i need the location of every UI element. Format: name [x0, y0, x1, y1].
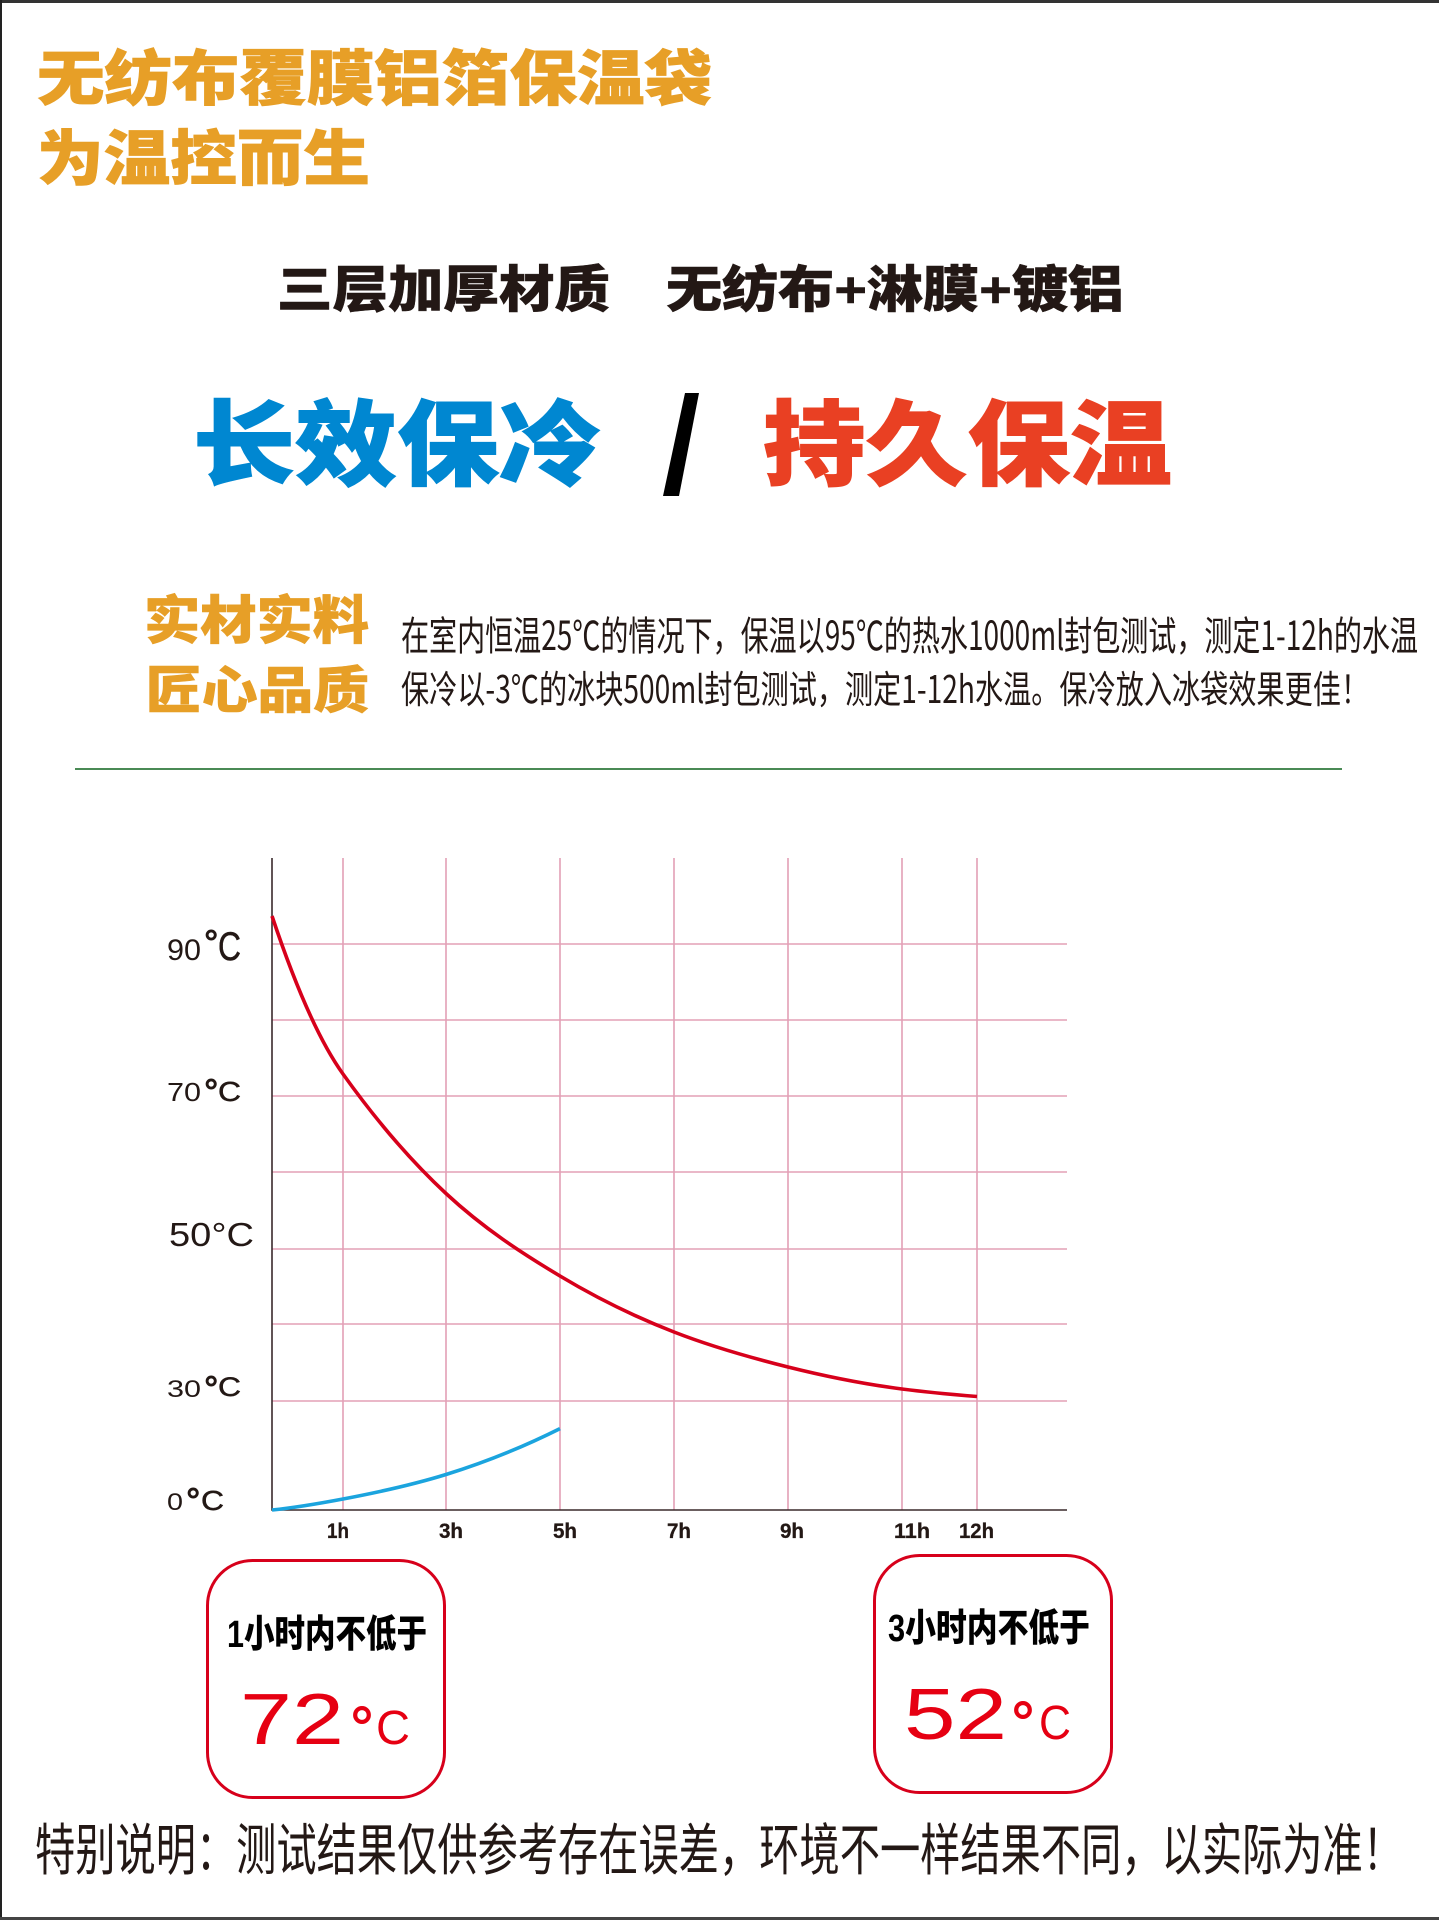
y axis labels: 70: [167, 1077, 201, 1107]
callout: 1 hour not below 72°C: C: [376, 1702, 410, 1755]
y axis labels: °: [204, 1071, 218, 1112]
y axis labels: C: [201, 1485, 224, 1516]
headline: long-lasting cold and heat retention: 长效保冷: [193, 394, 601, 498]
title: 为温控而生: [37, 126, 370, 193]
callout: 1 hour not below 72°C: 1小时内不低于: [227, 1614, 427, 1656]
x axis labels: [327, 1520, 994, 1543]
chart axes: [272, 858, 1067, 1510]
curve: heat retention: [272, 916, 977, 1396]
x axis labels: 3h: [439, 1520, 463, 1543]
x axis labels: 12h: [959, 1520, 994, 1543]
x axis labels: 5h: [553, 1520, 577, 1543]
callout: 3 hours not below 52°C: C: [1039, 1697, 1071, 1750]
y axis labels: C: [218, 925, 241, 969]
quality slogan: 匠心品质: [146, 663, 369, 719]
callout: 1 hour not below 72°C: 72: [240, 1680, 344, 1760]
callout: 3 hours not below 52°C: 52: [904, 1675, 1007, 1755]
quality slogan: [144, 592, 369, 719]
subtitle: three-layer material: 无纺布+淋膜+镀铝: [666, 262, 1124, 318]
test description text: [401, 604, 1418, 714]
y axis labels: °: [204, 1368, 218, 1409]
x axis labels: 11h: [894, 1520, 930, 1543]
curve: cold retention: [272, 1429, 560, 1510]
quality slogan: 实材实料: [144, 592, 369, 651]
y axis labels: 90: [167, 934, 201, 967]
title: [37, 46, 712, 193]
subtitle: three-layer material: 三层加厚材质: [277, 262, 610, 318]
callout: 1 hour not below 72°C: [208, 1560, 444, 1798]
headline: long-lasting cold and heat retention: [193, 393, 1172, 498]
y axis labels: 30: [167, 1376, 201, 1403]
title: 无纺布覆膜铝箔保温袋: [37, 46, 712, 113]
y axis labels: C: [218, 1372, 241, 1402]
callout: 3 hours not below 52°C: °: [1011, 1690, 1035, 1757]
callout: 3 hours not below 52°C: 3小时内不低于: [888, 1608, 1090, 1650]
y axis labels: °: [186, 1480, 200, 1521]
subtitle: three-layer material: [277, 262, 1124, 318]
y axis labels: 0: [167, 1489, 183, 1516]
callout: 3 hours not below 52°C: [874, 1556, 1112, 1792]
line chart: temperature over time: [167, 858, 1067, 1543]
callout: 1 hour not below 72°C: °: [350, 1695, 374, 1762]
x axis labels: 9h: [780, 1520, 804, 1543]
x axis labels: 7h: [667, 1520, 691, 1543]
y axis labels: 50°C: [169, 1216, 254, 1253]
y axis labels: °: [204, 922, 218, 963]
headline: long-lasting cold and heat retention: 持久保温: [763, 394, 1172, 498]
y axis labels: C: [218, 1076, 241, 1107]
y axis labels: [167, 922, 254, 1521]
x axis labels: 1h: [327, 1520, 349, 1543]
